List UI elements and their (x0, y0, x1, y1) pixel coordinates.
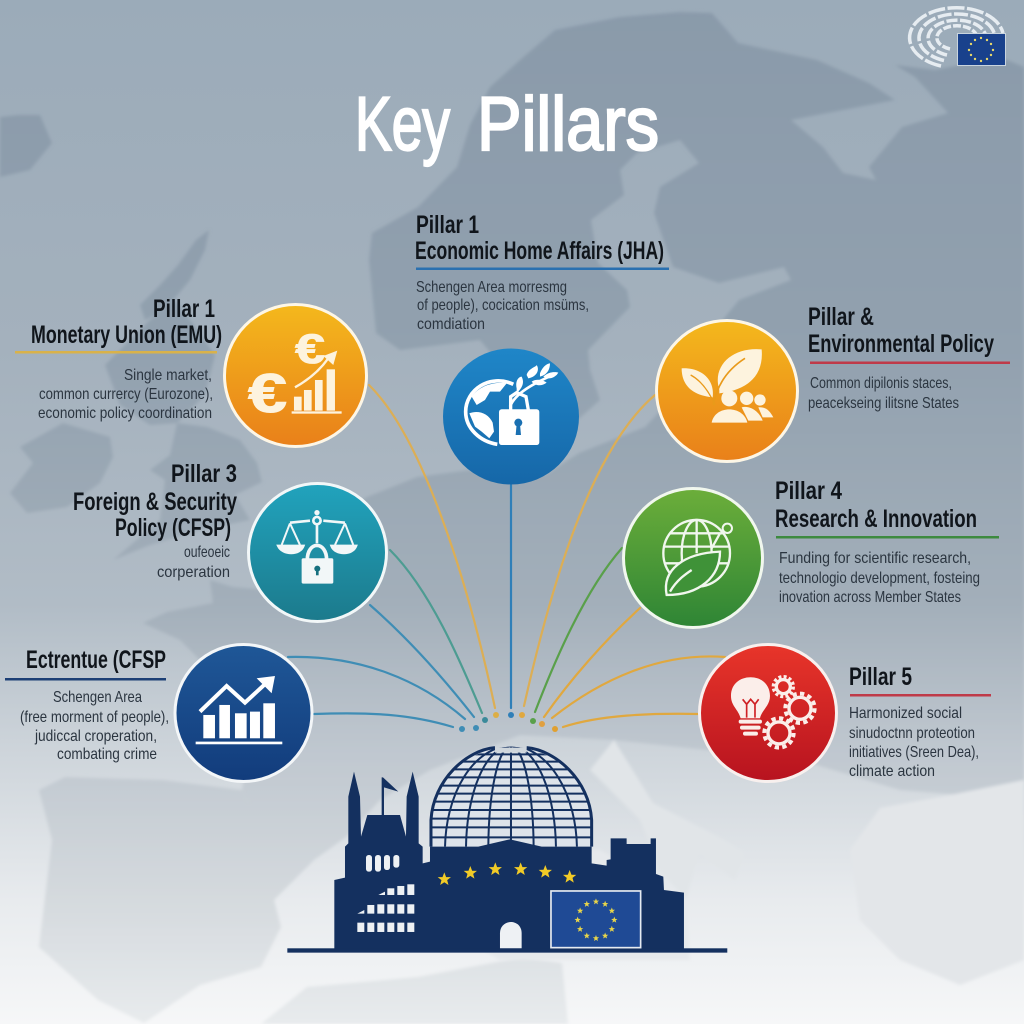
icon: euro growth: € (248, 362, 287, 424)
title: Pillars (477, 82, 659, 167)
panel: Pillar 3 Foreign and Security Policy (73, 460, 386, 622)
text: schengen description: (free morment of people), (20, 709, 169, 726)
text: monetary union description: economic policy coordination (38, 405, 212, 422)
top-right parliament logo (910, 8, 1006, 66)
text: foreign policy description: corperation (157, 564, 230, 581)
icon: leaves and people (656, 320, 798, 462)
icon: euro growth (224, 304, 366, 446)
text: social description: climate action (849, 763, 935, 780)
text: schengen description: Schengen Area (53, 689, 142, 706)
castle and main block (334, 772, 684, 949)
panel: Pillar 4 Research and Innovation (624, 477, 999, 628)
gold stars (438, 862, 576, 885)
text: environmental description: peacekseing ilitsne States (808, 395, 959, 412)
heading: home affairs (415, 211, 669, 270)
text: home affairs description (416, 279, 589, 333)
heading: pillar 5: Pillar 5 (849, 663, 912, 691)
text: schengen description (20, 689, 169, 763)
text: social description (849, 705, 979, 780)
dome (430, 746, 594, 847)
text: monetary union description (38, 367, 213, 422)
text: social description: initiatives (Sreen Dea), (849, 744, 979, 761)
connector lines (288, 385, 725, 732)
icon: scales and lock (248, 484, 386, 622)
building: parliament silhouette (287, 745, 727, 954)
heading: ectrentue: Ectrentue (CFSP (26, 646, 166, 674)
heading: monetary union (15, 295, 222, 354)
EU flag (551, 891, 641, 948)
text: foreign policy description (157, 544, 230, 581)
icon: lightbulb and gears (700, 644, 836, 782)
text: environmental description: Common dipilonis staces, (810, 375, 952, 392)
text: research description: inovation across Member States (779, 589, 961, 606)
text: home affairs description: of people), cocication msüms, (417, 297, 589, 314)
heading: monetary union: Monetary Union (EMU) (31, 321, 222, 349)
heading: research and innovation: Pillar 4 (775, 477, 842, 505)
panel: Pillar 1 Monetary Union (15, 295, 366, 446)
text: environmental description (808, 375, 959, 412)
text: research description (779, 550, 980, 606)
heading: foreign and security: Policy (CFSP) (115, 514, 231, 542)
heading: environmental policy (808, 303, 1010, 364)
heading: foreign and security (73, 460, 237, 542)
text: foreign policy description: oufeoeic (184, 544, 230, 561)
icon: globe and leaf (624, 488, 762, 628)
icon: euro growth: € (295, 325, 325, 372)
heading: foreign and security: Foreign & Security (73, 488, 237, 516)
panel: Ectrentue CFSP (5, 644, 312, 782)
base line (287, 948, 727, 953)
heading: monetary union: Pillar 1 (153, 295, 215, 323)
title: Key (355, 82, 450, 167)
text: schengen description: combating crime (57, 746, 157, 763)
heading: research and innovation (775, 477, 999, 538)
text: research description: technologio development, fosteing (779, 570, 980, 587)
text: social description: Harmonized social (849, 705, 962, 722)
panel: Pillar 1 Economic Home Affairs (415, 211, 669, 484)
text: home affairs description: comdiation (417, 316, 485, 333)
text: monetary union description: Single market, (124, 367, 212, 384)
windows (357, 855, 522, 948)
heading: environmental policy: Pillar & (808, 303, 874, 331)
icon: bar chart with arrow (175, 644, 312, 782)
panel: Pillar 6 Environmental Policy (656, 303, 1010, 462)
text: schengen description: judiccal croperation, (34, 728, 157, 745)
heading: home affairs: Pillar 1 (416, 211, 479, 239)
text: home affairs description: Schengen Area morresmg (416, 279, 567, 296)
text: research description: Funding for scientific research, (779, 550, 971, 567)
title (355, 82, 659, 167)
panel: Pillar 5 (700, 644, 991, 782)
text: monetary union description: common currercy (Eurozone), (39, 386, 213, 403)
text: social description: sinudoctnn proteotion (849, 725, 975, 742)
icon: globe, branch and lock (443, 348, 579, 484)
heading: foreign and security: Pillar 3 (171, 460, 237, 488)
heading: home affairs: Economic Home Affairs (JHA) (415, 237, 664, 265)
